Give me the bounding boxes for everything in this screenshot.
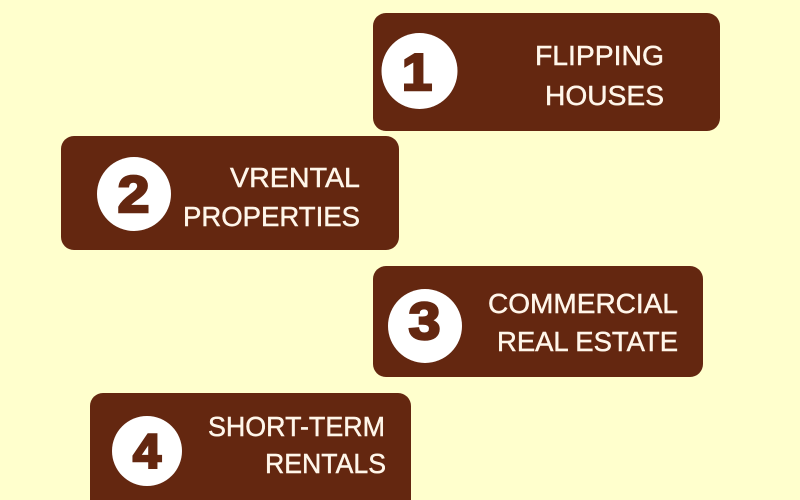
label: flipping houses — [535, 40, 664, 111]
icon: number 2 badge: 2 — [118, 165, 149, 223]
label: short-term rentals: RENTALS — [265, 448, 386, 479]
panel: rental properties — [61, 136, 399, 250]
panel: commercial real estate — [373, 266, 703, 377]
icon: number 2 badge — [97, 157, 171, 231]
panel: short-term rentals — [90, 393, 411, 500]
label: rental properties: VRENTAL — [230, 162, 360, 193]
icon: number 1 badge: 1 — [402, 44, 432, 102]
icon: number 4 badge: 4 — [133, 425, 162, 479]
label: flipping houses: HOUSES — [545, 80, 664, 111]
label: flipping houses: FLIPPING — [535, 40, 664, 71]
label: short-term rentals — [208, 411, 386, 479]
icon: number 3 badge — [388, 289, 462, 363]
icon: number 3 badge: 3 — [409, 292, 440, 350]
label: rental properties: PROPERTIES — [183, 201, 360, 232]
icon: number 4 badge — [112, 416, 182, 486]
label: commercial real estate: REAL ESTATE — [497, 326, 678, 357]
label: commercial real estate — [488, 288, 678, 357]
label: commercial real estate: COMMERCIAL — [488, 288, 678, 319]
label: rental properties — [183, 162, 360, 232]
panel: flipping houses — [373, 13, 720, 131]
icon: number 1 badge — [382, 33, 458, 109]
label: short-term rentals: SHORT-TERM — [208, 411, 385, 442]
